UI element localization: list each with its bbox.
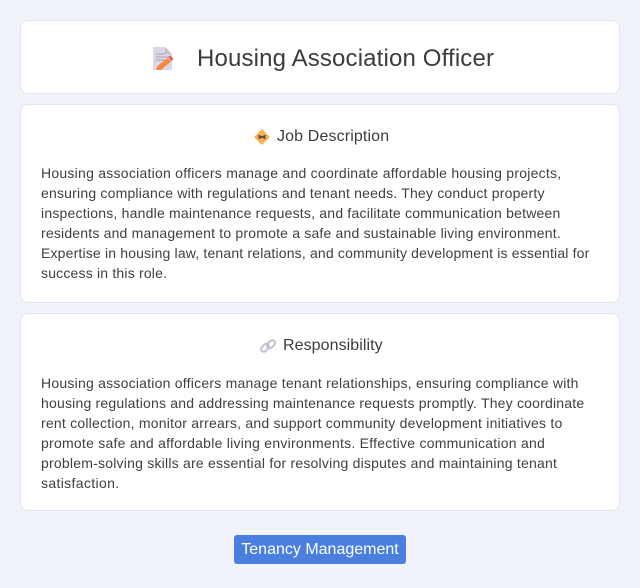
title text: Housing Association Officer	[197, 45, 494, 72]
job description text: residents and management to promote a safe and sustainable living environment.	[41, 225, 561, 241]
responsibility text: rent collection, monitor arrears, and support community development initiatives to	[41, 415, 562, 431]
responsibility text: satisfaction.	[41, 475, 119, 491]
responsibility text: Housing association officers manage tenant relationships, ensuring compliance with	[41, 375, 579, 391]
responsibility text: promote safe and affordable living environments. Effective communication and	[41, 435, 545, 451]
heading: responsibility: Responsibility	[283, 337, 383, 354]
panel: title	[20, 20, 620, 94]
tag button: tenancy management: Tenancy Management	[241, 541, 399, 558]
job description text: ensuring compliance with regulations and tenant needs. They conduct property	[41, 185, 545, 201]
responsibility text	[41, 375, 584, 491]
panel: job description	[20, 104, 620, 303]
panel: responsibility	[20, 313, 620, 511]
responsibility text: problem-solving skills are essential for resolving disputes and maintaining tenant	[41, 455, 557, 471]
job description text	[41, 165, 590, 281]
icon: chain link	[260, 339, 276, 353]
responsibility text: housing regulations and addressing maintenance requests promptly. They coordinate	[41, 395, 584, 411]
tag button: tenancy management	[234, 535, 406, 564]
job description text: Housing association officers manage and coordinate affordable housing projects,	[41, 165, 561, 181]
job description text: Expertise in housing law, tenant relations, and community development is essential for	[41, 245, 589, 261]
job description text: inspections, handle maintenance requests, and facilitate communication between	[41, 205, 561, 221]
icon: document with pencil	[153, 47, 174, 70]
job description text: success in this role.	[41, 265, 167, 281]
heading: job description: Job Description	[277, 128, 389, 145]
icon: diamond sign	[254, 129, 270, 145]
